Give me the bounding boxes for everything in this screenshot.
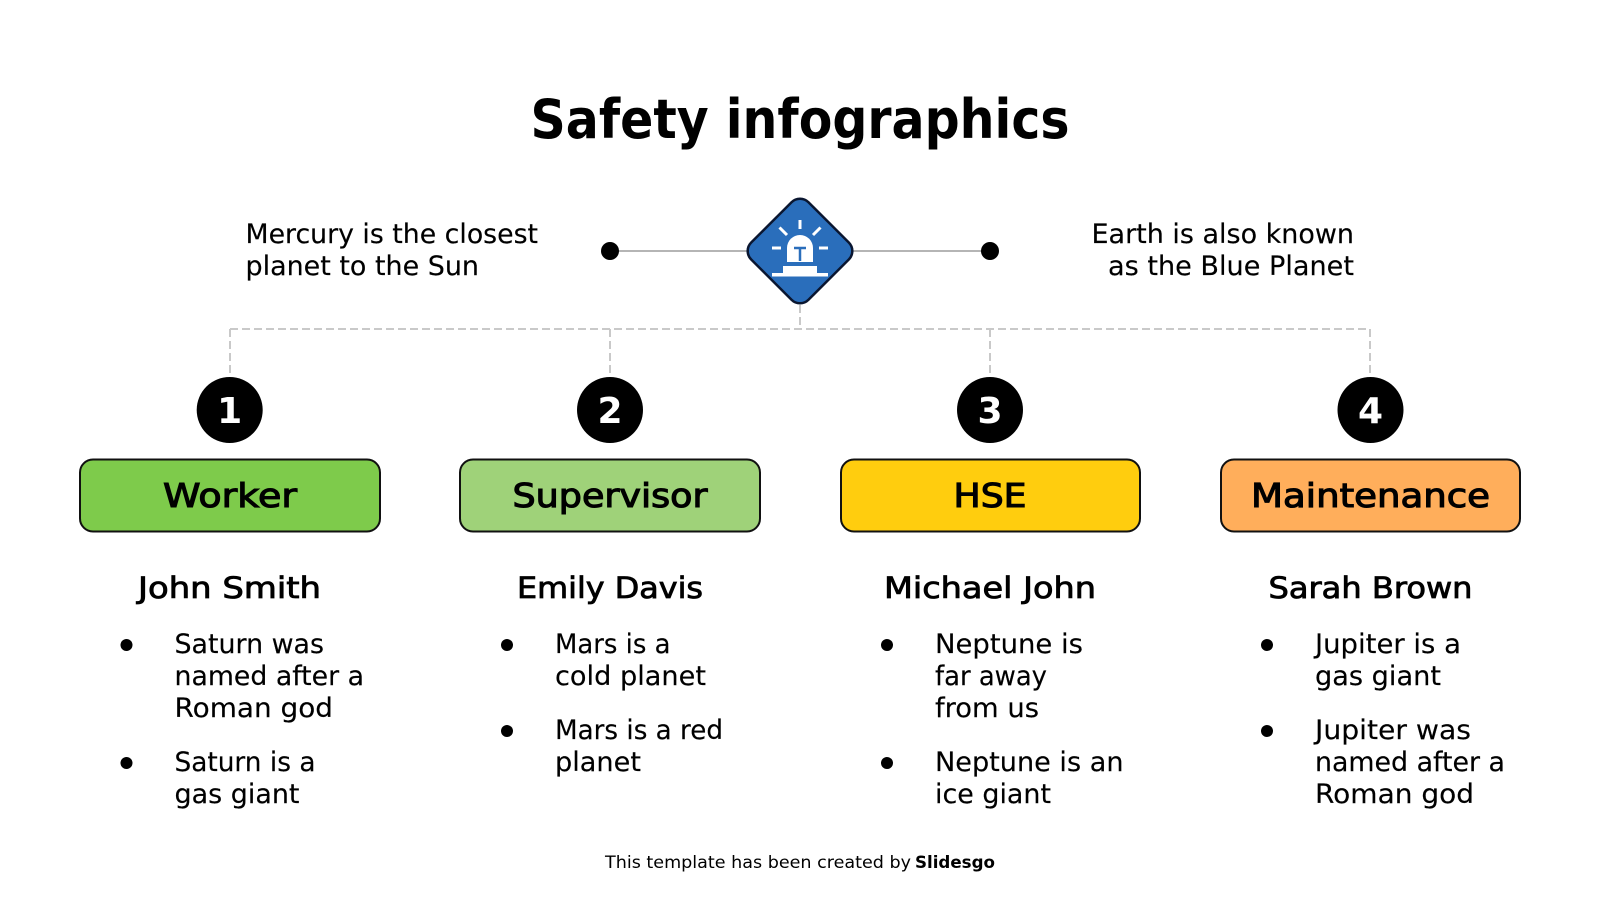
bullet list: Supervisor: planet bbox=[555, 747, 641, 778]
number badge 4: 4 bbox=[1358, 391, 1383, 432]
text block: Mercury: planet to the Sun bbox=[246, 251, 479, 282]
number badge 2: 2 bbox=[597, 391, 623, 432]
label box: Worker: Worker bbox=[163, 476, 297, 515]
dashed connector tree bbox=[230, 305, 1370, 377]
bullet list: Worker: Saturn was bbox=[174, 629, 324, 660]
footer credit: This template has been created by bbox=[604, 853, 911, 873]
bullet list: Worker: gas giant bbox=[174, 779, 300, 810]
label box: Maintenance bbox=[1221, 460, 1520, 532]
connector line: left and right of icon bbox=[610, 250, 990, 252]
bullet list: Maintenance bbox=[1261, 629, 1505, 810]
bullet list: Supervisor bbox=[501, 629, 723, 778]
bullet list: Maintenance: named after a bbox=[1315, 747, 1505, 778]
bullet list: Supervisor: cold planet bbox=[555, 661, 706, 692]
number badge 1 bbox=[197, 377, 263, 443]
bullet list: Worker: Saturn is a bbox=[174, 747, 316, 778]
text block: Earth: Earth is also known bbox=[1092, 219, 1354, 250]
label box: HSE: HSE bbox=[954, 476, 1026, 515]
title: Safety infographics bbox=[530, 87, 1070, 151]
bullet list: HSE: far away bbox=[935, 661, 1047, 692]
bullet list: Maintenance: Jupiter is a bbox=[1313, 629, 1461, 660]
bullet list: Worker: Roman god bbox=[174, 693, 333, 724]
number badge 3: 3 bbox=[977, 391, 1003, 432]
name: Sarah Brown: Sarah Brown bbox=[1268, 571, 1472, 605]
right connector dot bbox=[981, 242, 999, 260]
text block: Mercury bbox=[246, 219, 538, 282]
bullet list: Supervisor: Mars is a red bbox=[555, 715, 723, 746]
icon: siren in blue diamond bbox=[743, 194, 857, 308]
bullet list: HSE: Neptune is bbox=[935, 629, 1083, 660]
panel: Supervisor bbox=[460, 377, 760, 778]
panel: Worker bbox=[80, 377, 380, 810]
name: Emily Davis: Emily Davis bbox=[517, 571, 703, 605]
label box: Supervisor: Supervisor bbox=[512, 476, 708, 515]
label box: Maintenance: Maintenance bbox=[1251, 476, 1490, 515]
label box: Worker bbox=[80, 460, 380, 532]
text block: Earth: as the Blue Planet bbox=[1108, 251, 1354, 282]
name: John Smith: John Smith bbox=[136, 571, 321, 605]
bullet list: Maintenance: Jupiter was bbox=[1313, 715, 1471, 746]
left connector dot bbox=[601, 242, 619, 260]
bullet list: Maintenance: gas giant bbox=[1315, 661, 1441, 692]
number badge 3 bbox=[957, 377, 1023, 443]
text block: Mercury: Mercury is the closest bbox=[246, 219, 538, 250]
bullet list: Worker: named after a bbox=[174, 661, 364, 692]
number badge 4 bbox=[1338, 377, 1404, 443]
bullet list: Worker bbox=[120, 629, 364, 810]
text block: Earth bbox=[1092, 219, 1354, 282]
bullet list: HSE bbox=[881, 629, 1124, 810]
bullet list: Maintenance: Roman god bbox=[1315, 779, 1474, 810]
bullet list: Supervisor: Mars is a bbox=[555, 629, 670, 660]
panel: HSE bbox=[841, 377, 1140, 810]
panel: Maintenance bbox=[1221, 377, 1520, 810]
label box: Supervisor bbox=[460, 460, 760, 532]
label box: HSE bbox=[841, 460, 1140, 532]
footer credit: Slidesgo bbox=[915, 853, 995, 873]
bullet list: HSE: ice giant bbox=[935, 779, 1051, 810]
number badge 2 bbox=[577, 377, 643, 443]
bullet list: HSE: Neptune is an bbox=[935, 747, 1124, 778]
name: Michael John: Michael John bbox=[884, 571, 1096, 605]
number badge 1: 1 bbox=[217, 391, 242, 432]
bullet list: HSE: from us bbox=[935, 693, 1039, 724]
